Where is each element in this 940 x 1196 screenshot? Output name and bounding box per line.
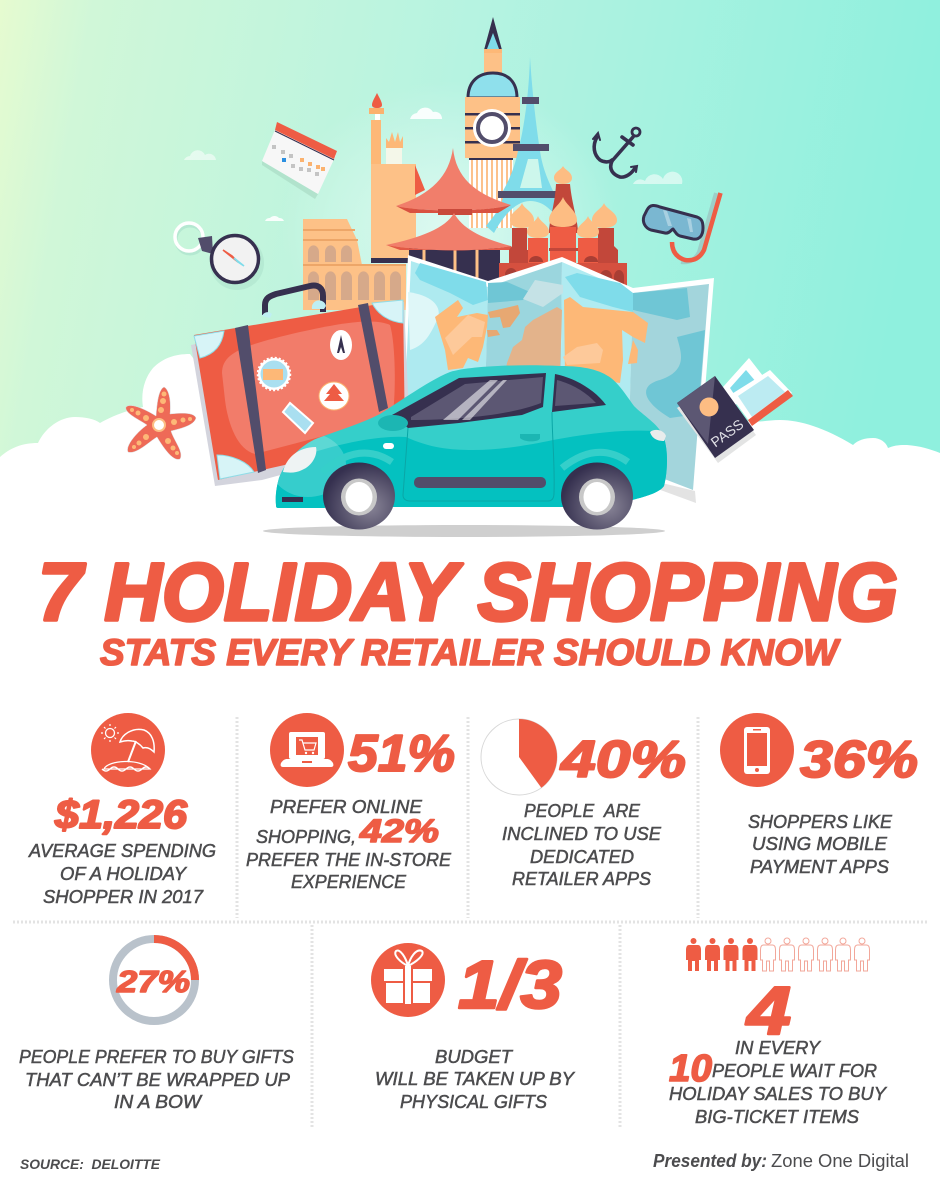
description bbox=[748, 812, 893, 877]
description: PEOPLE WAIT FOR bbox=[712, 1061, 877, 1081]
description: SHOPPERS LIKE bbox=[748, 812, 893, 832]
icon: starfish bbox=[126, 387, 196, 459]
panel: mobile payment bbox=[720, 713, 918, 877]
text: PASS: PASS bbox=[708, 416, 746, 450]
credit: Presented by: bbox=[653, 1151, 767, 1171]
chart: 40% pie bbox=[481, 719, 557, 795]
glow behind landmarks bbox=[280, 80, 620, 380]
description: INCLINED TO USE bbox=[502, 824, 662, 844]
stat: 36%: 36% bbox=[800, 731, 918, 789]
description: IN A BOW bbox=[114, 1092, 203, 1112]
door handle bbox=[520, 434, 540, 441]
sky background bbox=[0, 0, 940, 520]
icon: snorkel mask bbox=[643, 193, 720, 262]
sticker: Colosseum bbox=[258, 358, 290, 390]
description: IN EVERY bbox=[735, 1038, 822, 1058]
map light island bbox=[523, 280, 563, 307]
description: PAYMENT APPS bbox=[750, 857, 889, 877]
icon: beach umbrella bbox=[91, 713, 165, 787]
description: SHOPPING, bbox=[256, 827, 356, 847]
stat: 40%: 40% bbox=[560, 731, 686, 789]
icon: smartphone bbox=[720, 713, 794, 787]
description: OF A HOLIDAY bbox=[60, 864, 188, 884]
windshield bbox=[392, 373, 546, 428]
description bbox=[246, 797, 452, 892]
sticker: pagoda bbox=[319, 382, 349, 410]
sticker: Eiffel Tower bbox=[330, 330, 352, 360]
illustration: travel landmarks bbox=[303, 17, 627, 310]
car body bbox=[270, 360, 670, 510]
title: 7 HOLIDAY SHOPPING bbox=[38, 547, 898, 638]
chart: 27% ring bbox=[113, 939, 195, 1021]
panel: online shopping bbox=[246, 713, 455, 892]
front wheel bbox=[323, 462, 395, 530]
description: BUDGET bbox=[435, 1047, 514, 1067]
stat: 4: 4 bbox=[745, 973, 791, 1049]
description bbox=[669, 1038, 888, 1127]
map panels bbox=[404, 261, 488, 440]
source note: SOURCE: DELOITTE bbox=[20, 1156, 161, 1172]
map oceans bbox=[415, 263, 488, 305]
illustration: red suitcase bbox=[191, 285, 410, 486]
description: PREFER ONLINE bbox=[270, 797, 423, 817]
panel: average spending bbox=[28, 713, 216, 907]
panel: retailer apps bbox=[481, 719, 686, 889]
landmark: Big Ben bbox=[465, 17, 520, 228]
door trim strip bbox=[414, 477, 546, 488]
landmark: Saint Basil's Cathedral bbox=[499, 166, 627, 290]
dotted dividers bbox=[13, 717, 928, 1127]
car shadow bbox=[263, 525, 665, 537]
description: SHOPPER IN 2017 bbox=[43, 887, 204, 907]
description: DEDICATED bbox=[530, 847, 634, 867]
lower bumper bbox=[276, 502, 326, 508]
continents bbox=[435, 300, 488, 370]
headlight bbox=[283, 447, 316, 473]
tail light bbox=[650, 430, 666, 441]
wing mirror bbox=[378, 415, 408, 431]
credit: Zone One Digital bbox=[771, 1151, 909, 1171]
icon: compass bbox=[175, 223, 264, 290]
stat: 1/3: 1/3 bbox=[458, 947, 562, 1023]
description: THAT CAN’T BE WRAPPED UP bbox=[25, 1070, 290, 1090]
icon: gift box bbox=[371, 943, 445, 1017]
description: HOLIDAY SALES TO BUY bbox=[669, 1084, 888, 1104]
description bbox=[19, 1047, 294, 1112]
panel: gifts without a bow bbox=[19, 939, 294, 1112]
description: WILL BE TAKEN UP BY bbox=[375, 1069, 576, 1089]
description: RETAILER APPS bbox=[512, 869, 651, 889]
small clouds bbox=[184, 108, 682, 221]
icon: laptop with cart bbox=[270, 713, 344, 787]
door outline bbox=[403, 412, 554, 501]
stat: 51%: 51% bbox=[348, 725, 455, 783]
white cloud ground bbox=[0, 354, 940, 1196]
description: PEOPLE PREFER TO BUY GIFTS bbox=[19, 1047, 294, 1067]
description: PREFER THE IN-STORE bbox=[246, 850, 452, 870]
description: AVERAGE SPENDING bbox=[28, 841, 216, 861]
landmark: pagoda bbox=[386, 148, 511, 288]
description bbox=[502, 801, 662, 889]
panel: waiting for holiday sales bbox=[669, 938, 888, 1127]
landmark: Eiffel Tower bbox=[486, 57, 570, 233]
stat: $1,226: $1,226 bbox=[54, 793, 188, 837]
panel: budget bbox=[371, 943, 576, 1112]
icon: calendar bbox=[262, 122, 337, 199]
stat: 10: 10 bbox=[669, 1048, 712, 1090]
description bbox=[28, 841, 216, 907]
description: BIG-TICKET ITEMS bbox=[695, 1107, 859, 1127]
icon: anchor bbox=[593, 128, 640, 177]
side window bbox=[552, 374, 606, 412]
description: USING MOBILE bbox=[752, 834, 888, 854]
illustration: folded world map bbox=[401, 255, 714, 503]
description: PEOPLE ARE bbox=[524, 801, 641, 821]
sticker: luggage tag bbox=[283, 403, 313, 433]
description bbox=[375, 1047, 576, 1112]
description: EXPERIENCE bbox=[291, 872, 407, 892]
landmark: Colosseum bbox=[303, 219, 406, 310]
small white indicator bbox=[383, 443, 394, 449]
stat: 27%: 27% bbox=[116, 964, 190, 999]
front bumper bbox=[282, 497, 303, 502]
landmark: Statue of Liberty bbox=[369, 93, 425, 263]
rear wheel bbox=[561, 462, 633, 530]
illustration: teal car bbox=[263, 360, 670, 537]
stat: 42%: 42% bbox=[359, 813, 439, 849]
illustration: passport and tickets bbox=[677, 358, 793, 463]
icon: people row, 4 of 10 bbox=[686, 938, 870, 971]
description: PHYSICAL GIFTS bbox=[400, 1092, 547, 1112]
subtitle: STATS EVERY RETAILER SHOULD KNOW bbox=[100, 632, 841, 673]
